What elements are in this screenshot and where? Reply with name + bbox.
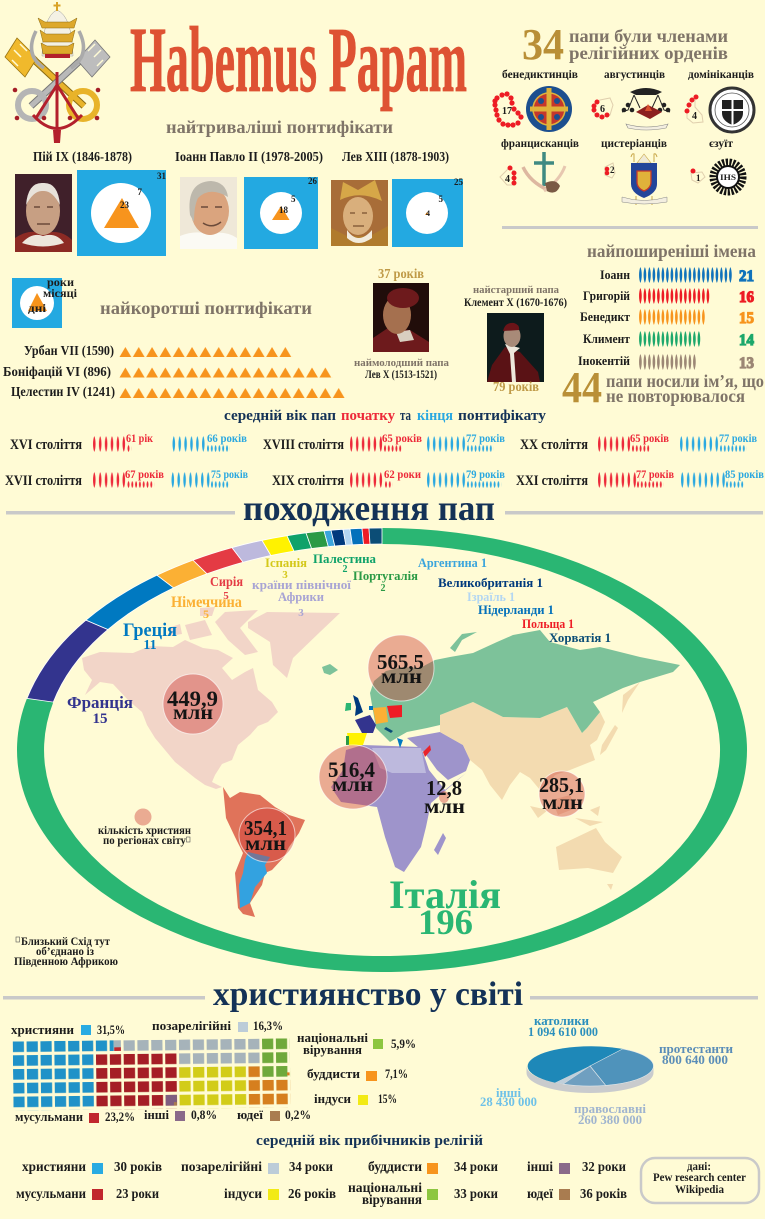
row: XVII century: XVII століття	[5, 473, 82, 489]
item: unaffiliated age: позарелігійні	[181, 1160, 262, 1175]
label: protestants: протестанти	[659, 1042, 733, 1056]
big number 34: 34	[522, 20, 564, 69]
segment: Portugal	[306, 531, 328, 548]
bubble: Asia: млн	[542, 792, 583, 814]
portrait: Leo XIII	[331, 180, 388, 246]
box: data sources: Wikipedia	[675, 1182, 724, 1196]
bubble: Africa	[319, 745, 387, 809]
legend: bubble: кількість християн	[98, 825, 191, 837]
row: Celestine IV	[11, 385, 346, 400]
item: folk religions	[297, 1031, 416, 1057]
row: Urban VII	[24, 344, 293, 359]
chart: Pius IX duration	[77, 170, 166, 256]
rosary: franciscans 4	[500, 166, 516, 186]
item: folk religions: 5,9%	[391, 1037, 416, 1051]
item: christians age	[22, 1160, 162, 1175]
rosary: cistercians 2: 2	[610, 165, 615, 175]
panel: most common names	[578, 241, 756, 372]
bubble: Europe: млн	[381, 666, 422, 688]
label: catholics	[528, 1014, 598, 1039]
row: Innocent 13	[578, 354, 754, 372]
bubble: Africa: млн	[332, 774, 373, 796]
region: Africa and Middle East	[331, 732, 470, 872]
label: others	[480, 1086, 537, 1109]
legend: years months days: дні	[28, 301, 47, 315]
item: folk religions age: національні	[348, 1181, 422, 1196]
item: jews age: 36 років	[580, 1187, 627, 1202]
label: North Africa 3: 3	[298, 607, 304, 619]
item: jews age	[527, 1187, 627, 1202]
callout: 44 unique names: не повторювалося	[606, 386, 745, 406]
panel: longest pontificates	[15, 150, 464, 256]
heading: shortest pontificates: найкоротші понтифікати	[100, 298, 312, 318]
caption: oldest: найстарший папа	[473, 284, 559, 296]
segment: France	[27, 620, 108, 702]
row: Boniface VI	[3, 365, 333, 380]
bubble: Asia: 285,1	[539, 773, 584, 797]
portrait: John Paul II	[180, 177, 237, 249]
callout: 44 unique names	[562, 363, 764, 412]
item: folk religions: вірування	[303, 1043, 362, 1057]
countries of Europe	[345, 695, 403, 748]
item: others age	[527, 1160, 626, 1175]
labels: denominations	[480, 1014, 733, 1127]
heading: average age: понтифікату	[458, 408, 547, 424]
heading: christianity in the world: християнство у світі	[213, 976, 523, 1013]
heading: orders	[569, 26, 728, 63]
region: Syria and Israel	[423, 745, 431, 757]
item: others: 0,8%	[191, 1108, 217, 1122]
segment: Israel	[343, 529, 352, 545]
item: jews: 0,2%	[285, 1108, 311, 1122]
item: muslims age: мусульмани	[16, 1187, 86, 1202]
label: Croatia 1: Хорватія 1	[549, 631, 611, 645]
panel: shortest pontificates	[3, 344, 346, 400]
label: North Africa 3: Африки	[278, 589, 324, 604]
label: Germany 5: Німеччина	[171, 594, 242, 611]
item: jews: юдеї	[237, 1108, 264, 1122]
row: XVI century: 66 років	[207, 433, 247, 445]
label: Italy 196: 196	[418, 902, 473, 942]
slice: protestants	[590, 1049, 653, 1085]
item: folk religions age	[348, 1181, 498, 1208]
chart: John Paul II duration: 18	[279, 205, 288, 215]
label: Netherlands 1: Нідерланди 1	[478, 603, 554, 617]
item: muslims	[15, 1110, 135, 1124]
item: hindus: індуси	[314, 1092, 351, 1106]
item: hindus age: 26 років	[288, 1187, 336, 1202]
row: Boniface VI: Боніфацій VI (896)	[3, 365, 111, 380]
row: XIX century: XIX століття	[272, 473, 344, 489]
item: christians age: 30 років	[114, 1160, 162, 1175]
item: unaffiliated: позарелігійні	[152, 1019, 232, 1033]
icon: franciscan cross	[523, 152, 565, 193]
heading: average age	[224, 408, 547, 424]
segment: Poland	[362, 528, 370, 544]
segment: Syria	[193, 548, 243, 574]
item: folk religions: національні	[297, 1031, 369, 1045]
chart: Pius IX duration: 23	[120, 200, 130, 210]
row: XVI century	[10, 433, 247, 453]
row: XVIII century: XVIII століття	[263, 437, 344, 453]
segment: Argentina	[324, 530, 335, 547]
panel: youngest pope	[354, 266, 449, 381]
row: XVIII century: 77 років	[466, 433, 505, 445]
segment: North Africa	[232, 540, 271, 562]
rosary: jesuits 1	[690, 168, 705, 183]
label: Spain 3: Іспанія	[265, 555, 307, 570]
row: Benedict 15	[580, 309, 754, 327]
row: Clement 14	[583, 331, 754, 349]
row: XXI century	[516, 469, 764, 489]
label: Portugal 2	[353, 568, 418, 594]
label: France 15: 15	[92, 711, 108, 727]
item: others age: 32 роки	[582, 1160, 626, 1175]
item: muslims age	[16, 1187, 159, 1202]
panel: popes in religious orders	[492, 20, 754, 205]
segment: Greece	[86, 575, 174, 630]
legend: years months days: місяці	[43, 286, 78, 300]
bubble: Middle East: 12,8	[426, 776, 462, 800]
label: protestants	[659, 1042, 733, 1067]
label: John Paul II: Іоанн Павло II (1978-2005)	[175, 150, 323, 165]
rosary: franciscans 4: 4	[505, 174, 510, 185]
heading: average age: кінця	[417, 408, 453, 424]
legend: bubble: по регіонах світу	[103, 835, 186, 847]
segment: Palestine	[287, 533, 312, 551]
row: Gregory 16: Григорій	[583, 289, 630, 303]
item: buddhists age: буддисти	[368, 1160, 422, 1175]
item: unaffiliated age: 34 роки	[289, 1160, 333, 1175]
chart: Leo XIII duration: 4	[426, 209, 430, 218]
row: Innocent 13: 13	[739, 355, 754, 372]
label: France 15	[67, 693, 133, 727]
segment: Great Britain	[331, 529, 346, 546]
label: catholics: католики	[534, 1014, 589, 1028]
item: buddhists: буддисти	[307, 1067, 360, 1081]
ring chart: popes by country	[17, 528, 747, 972]
item: unaffiliated age	[181, 1160, 333, 1175]
label: others: 28 430 000	[480, 1095, 537, 1109]
rosary: benedictines 17	[492, 91, 524, 128]
label: catholics: 1 094 610 000	[528, 1025, 598, 1039]
item: muslims: мусульмани	[15, 1110, 83, 1124]
label: Great Britain 1: Великобританія 1	[438, 576, 543, 590]
label: North Africa 3: країни північної	[252, 577, 351, 592]
row: XIX century	[272, 469, 505, 489]
icon: papal coat of arms	[5, 2, 110, 143]
portrait: Leo X	[373, 283, 429, 352]
row: Benedict 15: Бенедикт	[580, 310, 630, 324]
heading: average age: початку	[341, 408, 395, 424]
bubble: Europe: 565,5	[377, 650, 424, 674]
label: others: інші	[496, 1086, 522, 1100]
age: 37: 37 років	[378, 266, 424, 281]
label: Italy 196: Італія	[389, 872, 501, 917]
callout: 44 unique names: 44	[562, 363, 602, 412]
item: christians: 31,5%	[97, 1023, 125, 1037]
row: Clement 14: Климент	[583, 332, 630, 346]
label: protestants: 800 640 000	[662, 1053, 728, 1067]
row: Gregory 16	[583, 288, 754, 306]
item: muslims: 23,2%	[105, 1110, 135, 1124]
row: XXI century: XXI століття	[516, 473, 588, 489]
legend: years months days	[12, 275, 78, 328]
waffle chart: religions share	[13, 1038, 290, 1110]
age: 79: 79 років	[493, 379, 539, 394]
row: John 21: Іоанн	[600, 268, 630, 282]
row: Benedict 15: 15	[739, 310, 754, 327]
order labels: єзуїт	[709, 138, 733, 150]
row: XXI century: 77 років	[636, 469, 674, 481]
label: Palestine 2: Палестина	[313, 551, 376, 566]
region: North America	[82, 607, 340, 789]
label: Italy 196	[389, 872, 501, 942]
rosary: benedictines 17: 17	[502, 106, 512, 117]
chart: Pius IX duration: 31	[157, 171, 166, 181]
row: XIX century: 62 роки	[384, 469, 421, 481]
item: folk religions age: 33 роки	[454, 1187, 498, 1202]
portrait: Clement X	[487, 313, 544, 382]
item: folk religions age: вірування	[362, 1193, 422, 1208]
item: hindus: 15%	[378, 1092, 397, 1106]
row: Gregory 16: 16	[739, 289, 754, 306]
item: hindus	[314, 1092, 397, 1106]
rosary: augustinians 6: 6	[600, 104, 605, 115]
slice: others	[555, 1066, 590, 1084]
bubbles: christians by region	[163, 635, 585, 862]
label: Israel 1: Ізраїль 1	[467, 590, 515, 604]
pie chart: christian denominations	[526, 1046, 654, 1093]
label: Greece 11	[123, 620, 177, 653]
item: others: інші	[144, 1108, 170, 1122]
segment: Germany	[157, 560, 207, 588]
label: Portugal 2: 2	[380, 583, 386, 594]
map: world	[82, 607, 680, 917]
row: XIX century: 79 років	[466, 469, 505, 481]
label: Palestine 2	[313, 551, 376, 575]
item: christians: християни	[11, 1023, 74, 1037]
item: buddhists age: 34 роки	[454, 1160, 498, 1175]
region: Argentina	[239, 852, 270, 908]
row: XX century	[520, 433, 757, 453]
box: data sources: Pew research center	[653, 1170, 747, 1184]
item: buddhists age	[368, 1160, 498, 1175]
bubble: Africa: 516,4	[328, 757, 375, 782]
footnote: Middle East: об’єднано із	[36, 946, 94, 958]
row: Clement 14: 14	[739, 332, 754, 349]
item: jews	[237, 1108, 311, 1122]
bubble: Latin America	[239, 808, 295, 862]
map labels: countries	[67, 551, 611, 942]
chart: Leo XIII duration	[392, 177, 464, 247]
footnote: Middle East	[14, 936, 118, 968]
icon: jesuit sunburst: IHS	[720, 173, 737, 182]
legend: bubble	[98, 808, 191, 847]
heading: average age: середній вік пап	[224, 408, 336, 424]
label: France 15: Франція	[67, 693, 133, 712]
panel: oldest pope	[464, 284, 567, 394]
row: XVII century	[5, 469, 248, 489]
heading: most common names: найпоширеніші імена	[587, 241, 756, 261]
icon: benedictine medal	[526, 86, 572, 132]
rosary: jesuits 1: 1	[696, 173, 701, 183]
chart: John Paul II duration: 5	[291, 194, 296, 204]
row: XX century: XX століття	[520, 437, 588, 453]
segment: Spain	[262, 536, 294, 556]
label: Spain 3: 3	[282, 569, 288, 581]
label: North Africa 3	[252, 577, 351, 619]
label: Syria 5: Сирія	[210, 575, 243, 590]
item: others age: інші	[527, 1160, 553, 1175]
item: unaffiliated: 16,3%	[253, 1019, 283, 1033]
item: unaffiliated	[152, 1019, 283, 1033]
row: John 21	[600, 267, 754, 285]
legend: religions share	[11, 1019, 416, 1124]
label: Argentina 1: Аргентина 1	[418, 556, 487, 570]
name: Leo X: Лев X (1513-1521)	[365, 367, 437, 381]
segment: Croatia	[369, 528, 382, 544]
footnote: Middle East: Близький Схід тут	[21, 936, 110, 948]
label: Portugal 2: Португалія	[353, 568, 418, 583]
order labels: домініканців	[688, 69, 754, 81]
caption: youngest: наймолодший папа	[354, 357, 449, 369]
heading: longest pontificates: найтриваліші понтифікати	[166, 117, 393, 137]
label: Pius IX: Пій IX (1846-1878)	[33, 150, 132, 165]
table: average age by religion	[16, 1160, 627, 1208]
row: XX century: 65 років	[630, 433, 669, 445]
bubble: North America: 449,9	[167, 686, 218, 711]
icon: cistercian arms	[622, 154, 667, 205]
bubble: Europe	[368, 635, 434, 701]
rosary: cistercians 2	[605, 163, 615, 178]
item: buddhists	[307, 1067, 408, 1081]
item: christians	[11, 1023, 125, 1037]
row: Celestine IV: Целестин IV (1241)	[11, 385, 115, 400]
order labels: цистеріанців	[601, 138, 667, 150]
row: XVIII century: 65 років	[382, 433, 422, 445]
icon: augustinian arms	[622, 88, 670, 130]
region: Russia and Europe	[322, 630, 680, 742]
label: Greece 11: Греція	[123, 620, 177, 641]
divider	[502, 226, 758, 229]
chart: John Paul II duration	[244, 176, 318, 249]
region: Asia	[440, 682, 659, 893]
bubble: North America: млн	[173, 702, 213, 724]
slice: catholics	[528, 1046, 623, 1083]
row: XVIII century	[263, 433, 505, 453]
item: jews age: юдеї	[527, 1187, 553, 1202]
slice: orthodox	[563, 1066, 606, 1086]
row: Urban VII: Урбан VII (1590)	[24, 344, 114, 359]
bubble: Latin America: млн	[245, 833, 286, 855]
label: orthodox: православні	[574, 1102, 647, 1116]
label: orthodox: 260 380 000	[578, 1113, 642, 1127]
item: christians age: християни	[22, 1160, 86, 1175]
box: data sources	[641, 1158, 759, 1203]
label: Leo XIII: Лев XIII (1878-1903)	[342, 150, 449, 165]
item: hindus age	[224, 1187, 336, 1202]
heading: origin of popes: походження пап	[243, 488, 495, 528]
item: buddhists: 7,1%	[385, 1067, 408, 1081]
icon: dominican seal	[710, 88, 754, 132]
rosary: dominicans 4: 4	[692, 111, 697, 122]
bubble: Asia	[539, 771, 585, 817]
segment: Netherlands	[350, 528, 364, 545]
box: data sources: дані:	[687, 1159, 711, 1173]
heading: orders: релігійних орденів	[569, 43, 728, 63]
label: Spain 3	[265, 555, 307, 581]
heading: orders: папи були членами	[569, 26, 728, 46]
label: Syria 5: 5	[223, 590, 229, 602]
rosary: dominicans 4	[684, 94, 703, 123]
label: Greece 11: 11	[143, 638, 157, 653]
item: hindus age: індуси	[224, 1187, 262, 1202]
bubble: Latin America: 354,1	[244, 816, 287, 840]
bubble: Middle East	[424, 776, 465, 818]
row: Innocent 13: Інокентій	[578, 354, 630, 368]
name: Clement X: Клемент X (1670-1676)	[464, 295, 567, 309]
item: others	[144, 1108, 217, 1122]
order labels: августинців	[604, 69, 665, 81]
rosary: augustinians 6	[592, 98, 613, 120]
bubble: North America	[163, 674, 223, 734]
chart: Leo XIII duration: 5	[438, 194, 444, 204]
row: John 21: 21	[739, 268, 754, 285]
bubble: Middle East: млн	[424, 796, 465, 818]
row: XVI century: XVI століття	[10, 437, 82, 453]
chart: John Paul II duration: 26	[308, 176, 318, 186]
label: Syria 5	[210, 575, 243, 602]
row: XVI century: 61 рік	[126, 433, 153, 445]
legend: years months days: роки	[47, 275, 74, 289]
segment: Italy	[17, 528, 747, 972]
chart: Leo XIII duration: 25	[454, 177, 464, 187]
region: North Africa	[372, 748, 426, 773]
icon: jesuit sunburst	[713, 162, 743, 192]
row: XX century: 77 років	[719, 433, 757, 445]
label: Poland 1: Польща 1	[522, 617, 574, 631]
row: XVII century: 75 років	[211, 469, 248, 481]
item: muslims age: 23 роки	[116, 1187, 159, 1202]
row: XVII century: 67 років	[125, 469, 164, 481]
chart: average age by century	[5, 433, 764, 489]
order labels: францисканців	[501, 138, 579, 150]
portrait: Pius IX	[15, 174, 72, 252]
order labels: бенедиктинців	[502, 69, 578, 81]
order labels	[501, 69, 754, 150]
label: orthodox	[574, 1102, 647, 1127]
heading: average age of followers: середній вік прибічників релігій	[256, 1133, 483, 1149]
label: Germany 5: 5	[203, 607, 209, 621]
region: South America	[223, 787, 305, 917]
heading: average age: та	[400, 408, 411, 424]
footnote: Middle East: Південною Африкою	[14, 956, 118, 968]
label: Palestine 2: 2	[342, 564, 348, 575]
chart: Pius IX duration: 7	[138, 187, 142, 197]
label: Germany 5	[171, 594, 242, 621]
